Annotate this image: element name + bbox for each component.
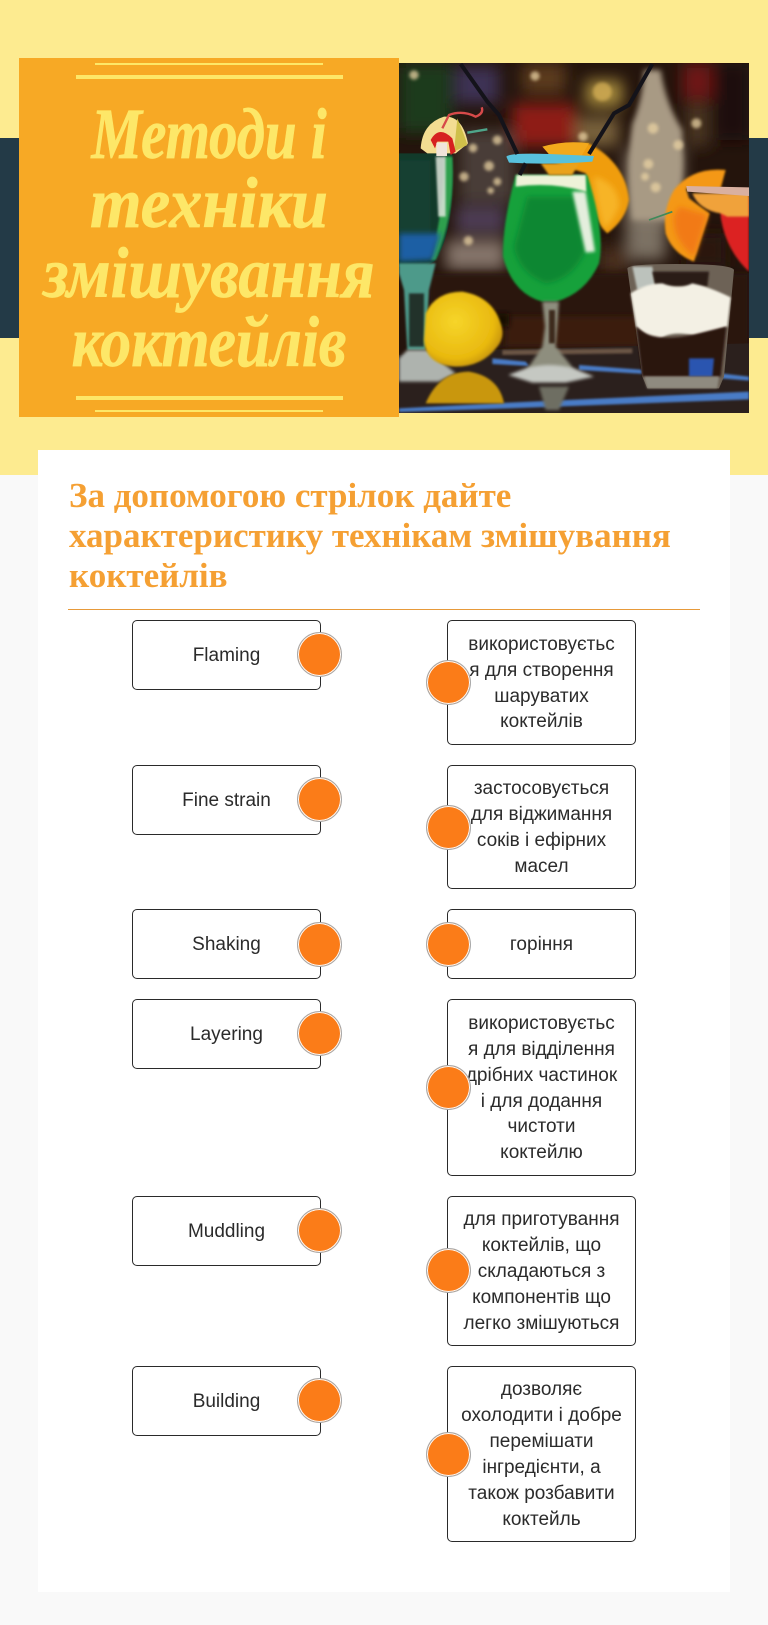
connector dot — [297, 922, 342, 967]
heading: характеристику технікам змішування — [69, 516, 671, 555]
orange slice behind green glass — [546, 143, 629, 233]
top yellow background band — [0, 0, 768, 475]
left term: Muddling — [132, 1196, 321, 1266]
connector dot — [297, 632, 342, 677]
right definition 6: також розбавити — [468, 1483, 615, 1504]
title panel — [19, 58, 399, 417]
right definition 1: використовуєтьс — [468, 634, 615, 655]
right definition 4: і для додання — [481, 1090, 602, 1112]
right definition 6 — [447, 1366, 636, 1542]
dark band behind the glasses — [429, 273, 749, 348]
right definition 5: коктейлів, що — [482, 1235, 601, 1256]
connector dot — [297, 777, 342, 822]
left term: Shaking: Shaking — [192, 934, 261, 955]
right definition 2: застосовується — [474, 778, 609, 799]
divider — [68, 609, 700, 610]
title — [42, 94, 375, 382]
left term: Fine strain: Fine strain — [182, 790, 271, 811]
photo: cocktails on a bar — [399, 63, 749, 413]
left blue-green glass — [399, 153, 453, 268]
connector dot — [426, 1248, 471, 1293]
left term: Layering: Layering — [190, 1024, 263, 1045]
right definition 1: шаруватих — [494, 686, 589, 706]
connector dot — [297, 1208, 342, 1253]
right definition 4: я для відділення — [468, 1039, 615, 1060]
right definition 2: соків і ефірних — [477, 830, 606, 851]
right definition 2: для віджимання — [471, 804, 612, 825]
left term: Layering — [132, 999, 321, 1069]
title: коктейлів — [72, 302, 346, 382]
connector dot — [426, 805, 471, 850]
heading: коктейлів — [69, 556, 228, 595]
right definition 6: інгредієнти, а — [482, 1457, 601, 1478]
straws — [461, 64, 526, 175]
right definition 4: використовуєтьс — [468, 1013, 615, 1034]
red cocktail and orange slice at right — [721, 197, 749, 272]
right definition 4: дрібних частинок — [466, 1065, 617, 1086]
bar table — [399, 343, 749, 413]
right definition 4: коктейлю — [500, 1142, 583, 1163]
blurred bar background — [399, 63, 749, 273]
left term: Building: Building — [193, 1391, 260, 1412]
right definition 5: компонентів що — [472, 1287, 611, 1308]
lemon — [424, 292, 503, 367]
cocktail cherry garnish — [421, 117, 468, 153]
right definition 4: чистоти — [508, 1116, 575, 1137]
distant bottle — [629, 70, 683, 220]
right definition 5: легко змішуються — [464, 1313, 619, 1334]
connector dot — [297, 1378, 342, 1423]
left term: Flaming: Flaming — [193, 645, 260, 666]
right definition 5: складаються з — [478, 1261, 605, 1282]
right definition 1: коктейлів — [500, 711, 583, 732]
title: техніки — [90, 163, 328, 243]
dark horizontal band — [0, 138, 768, 338]
left term: Muddling: Muddling — [188, 1221, 265, 1242]
heading: За допомогою стрілок дайте — [69, 476, 511, 515]
right definition 6: коктейль — [502, 1509, 581, 1530]
right definition 4 — [447, 999, 636, 1176]
title: змішування — [43, 233, 375, 313]
heading — [69, 476, 671, 595]
right definition 2 — [447, 765, 636, 889]
green cocktail glass — [503, 175, 601, 302]
right definition 1 — [447, 620, 636, 745]
right definition 1: я для створення — [469, 660, 614, 681]
left term: Building — [132, 1366, 321, 1436]
left term: Fine strain — [132, 765, 321, 835]
connector dot — [297, 1011, 342, 1056]
left term: Flaming — [132, 620, 321, 690]
short glass with white and dark layers — [627, 264, 734, 388]
bokeh lights — [409, 70, 701, 381]
title: Методи і — [91, 94, 327, 174]
connector dot — [426, 660, 471, 705]
right definition 3: горіння — [510, 934, 573, 955]
right definition 5 — [447, 1196, 636, 1346]
white content panel — [38, 450, 730, 1592]
right definition 6: дозволяє — [501, 1379, 582, 1400]
right definition 6: перемішати — [490, 1431, 593, 1452]
left term: Shaking — [132, 909, 321, 979]
connector dot — [426, 1065, 471, 1110]
right definition 3 — [447, 909, 636, 979]
connector dot — [426, 922, 471, 967]
right definition 2: масел — [514, 856, 569, 877]
right definition 5: для приготування — [463, 1209, 620, 1230]
connector dot — [426, 1432, 471, 1477]
right definition 6: охолодити і добре — [461, 1405, 622, 1426]
